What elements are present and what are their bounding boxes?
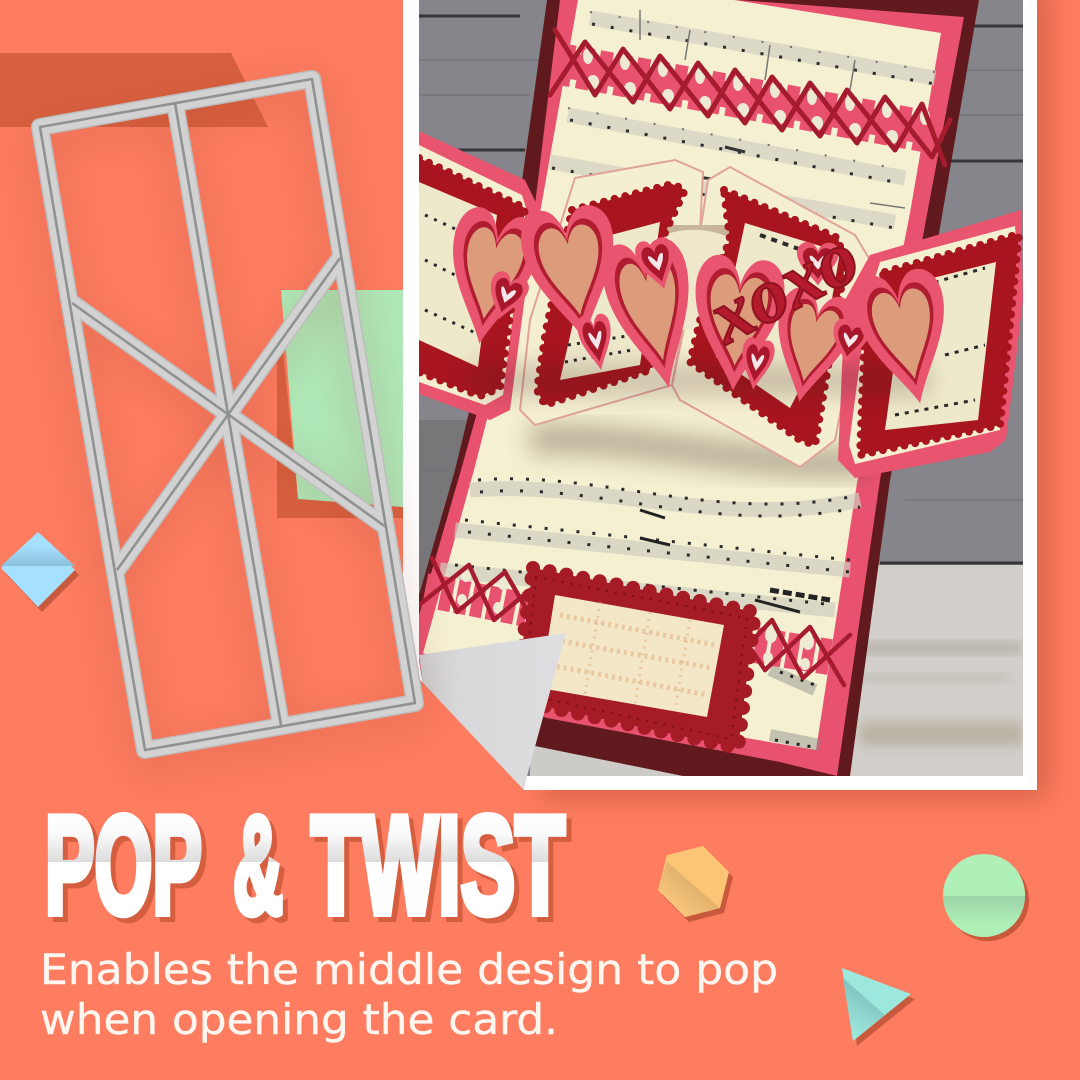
pop-up panel right [838,210,1023,478]
music sheet [423,0,941,750]
photo contents [419,0,1023,776]
xoxo word: xoxo [693,212,872,361]
pop-up frame centre left [537,184,685,405]
maroon card base [419,0,979,776]
criss-cross strip lower left [419,558,530,620]
wood background [419,0,1023,776]
title [45,788,565,943]
heart 3 [604,239,688,388]
die shadow [40,89,415,760]
icon: green circle [943,854,1029,941]
scalloped label bottom [515,568,755,748]
music notation upper [550,10,935,228]
photo frame shadow [540,0,1050,800]
accent: green paper with dark shadow [277,290,403,518]
heart 1 [453,207,532,344]
subtitle text: Enables the middle design to pop [40,945,778,994]
title: & [233,788,283,943]
folded page corner [419,633,566,790]
banner: dark band behind die [0,53,268,127]
heart 3 small [635,237,672,289]
heart 5 small lower [834,318,867,362]
heart 4 small [742,337,775,390]
heart 2 [521,205,614,331]
icon: orange hexagon [658,846,733,922]
photo panel: pop-up card [403,0,1037,790]
hearts [437,199,964,412]
heart 1 small [490,271,529,319]
heart 5 small top [797,242,839,286]
heart 4 [696,254,784,390]
heart 6 [860,268,944,404]
pop-up panel centre back [520,160,870,467]
subtitle text [40,945,778,1044]
criss-cross strip lower right [748,620,850,685]
title: POP [45,788,202,943]
criss-cross strip top [550,30,950,165]
music notation lower [440,479,860,748]
icon: blue diamond [1,532,79,612]
subtitle text: when opening the card. [40,995,558,1044]
icon: teal triangle [842,968,915,1046]
title: TWIST [311,788,565,943]
pop-up frame centre right [690,190,845,445]
heart 2 small [578,314,611,370]
pop-up panel left [419,131,537,420]
shadow under pop-up [530,439,865,463]
heart 5 [778,287,846,402]
white photo frame [403,0,1037,790]
pink mat [419,0,964,776]
metal die cut frame [40,79,415,750]
